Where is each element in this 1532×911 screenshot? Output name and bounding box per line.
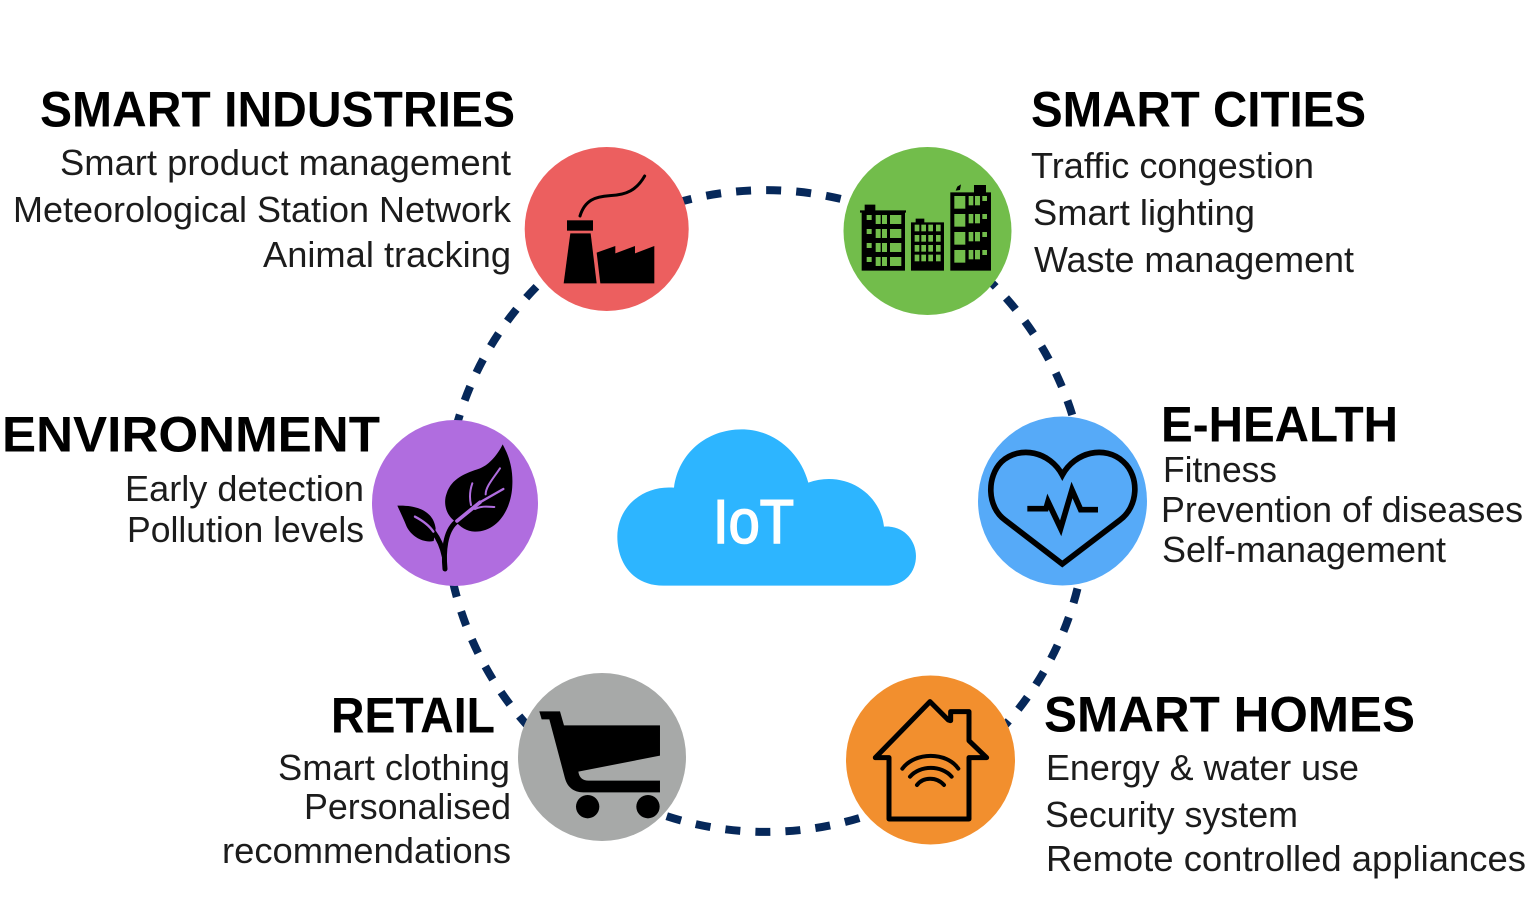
list: Self-management — [1162, 529, 1446, 570]
list: Smart clothing — [278, 747, 510, 788]
list: Pollution levels — [127, 509, 364, 550]
icon: shopping cart — [539, 711, 660, 818]
heading: E-HEALTH — [1161, 396, 1398, 452]
list: Meteorological Station Network — [13, 189, 512, 230]
e-health circle — [978, 416, 1147, 586]
icon: heart with pulse — [991, 452, 1135, 564]
list: Animal tracking — [263, 234, 511, 275]
panel: smart industries — [13, 82, 689, 311]
panel: e-health — [978, 396, 1523, 586]
list — [1045, 747, 1526, 879]
list: Smart product management — [60, 142, 511, 183]
list: Personalised — [304, 786, 511, 827]
smart industries circle — [525, 147, 689, 311]
panel: smart cities — [844, 82, 1366, 315]
panel: smart homes — [846, 676, 1526, 879]
list: Fitness — [1163, 449, 1277, 490]
list: Smart lighting — [1033, 192, 1255, 233]
dashed ring — [445, 190, 1087, 832]
list: Security system — [1045, 794, 1298, 835]
icon: plant — [397, 444, 512, 569]
heading: SMART INDUSTRIES — [40, 82, 515, 138]
list — [125, 468, 364, 550]
list: Remote controlled appliances — [1046, 838, 1526, 879]
heading: RETAIL — [331, 688, 495, 744]
list — [222, 747, 511, 871]
list: Traffic congestion — [1031, 145, 1314, 186]
environment circle — [372, 420, 538, 586]
list: Energy & water use — [1046, 747, 1359, 788]
heading: SMART CITIES — [1031, 82, 1366, 138]
list: Early detection — [125, 468, 364, 509]
retail circle — [518, 673, 686, 841]
icon: connected house — [875, 702, 987, 819]
list — [1031, 145, 1354, 280]
central IoT cloud — [617, 429, 916, 586]
heading: ENVIRONMENT — [2, 406, 380, 462]
list: Prevention of diseases — [1161, 489, 1523, 530]
list — [1161, 449, 1523, 570]
cloud shape — [617, 429, 916, 586]
list — [13, 142, 512, 275]
heading: SMART HOMES — [1044, 686, 1415, 742]
smart cities circle — [844, 147, 1012, 315]
IoT label: IoT — [713, 488, 794, 557]
panel: environment — [2, 406, 538, 586]
icon: buildings — [860, 184, 991, 271]
panel: retail — [222, 673, 686, 871]
icon: factory — [564, 176, 654, 283]
list: Waste management — [1034, 239, 1354, 280]
smart homes circle — [846, 676, 1015, 844]
list: recommendations — [222, 830, 511, 871]
